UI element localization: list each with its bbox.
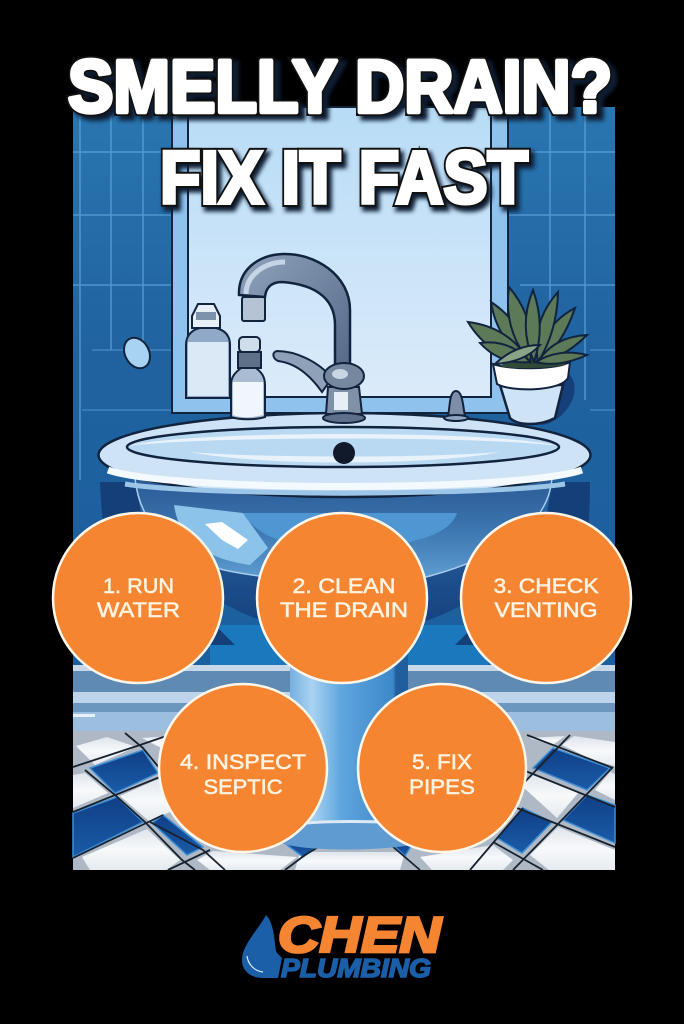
- title line 2: FIX IT FAST: [160, 136, 528, 219]
- sink drain: [333, 442, 355, 464]
- step 5 badge: [358, 684, 526, 852]
- step 3 badge: VENTING: [494, 599, 598, 622]
- step 4 badge: SEPTIC: [204, 776, 282, 799]
- step 2 badge: [257, 513, 427, 683]
- bottle: small: [231, 337, 265, 419]
- title line 2: FIX IT FAST: [160, 136, 528, 219]
- step 2 badge: 2. CLEAN: [292, 575, 396, 598]
- step 3 badge: 3. CHECK: [494, 575, 598, 598]
- drain stopper knob: [444, 391, 468, 421]
- logo wordmark: CHEN: CHEN: [278, 907, 442, 963]
- icon: water drop: [242, 915, 282, 978]
- title: [68, 45, 617, 223]
- logo: Chen Plumbing: [242, 907, 442, 983]
- title line 1: SMELLY DRAIN?: [73, 49, 617, 132]
- step 5 badge: 5. FIX: [412, 751, 472, 774]
- step 2 badge: THE DRAIN: [280, 599, 408, 622]
- step 4 badge: 4. INSPECT: [180, 751, 306, 774]
- baseboard molding: [73, 665, 615, 731]
- title line 1: SMELLY DRAIN?: [68, 45, 612, 128]
- step 5 badge: PIPES: [409, 776, 475, 799]
- soap bar: [119, 333, 155, 373]
- faucet: [239, 254, 365, 423]
- title line 1: SMELLY DRAIN?: [68, 45, 612, 128]
- sink rim: [98, 413, 590, 497]
- bottle: tall soap: [186, 304, 230, 398]
- wall tiles: [73, 107, 615, 667]
- checkered floor: [73, 731, 615, 870]
- sink basin underside: [135, 478, 552, 634]
- step 1 badge: 1. RUN: [103, 575, 174, 598]
- mirror: [172, 107, 508, 413]
- potted plant: [468, 287, 587, 425]
- sink pedestal: [278, 630, 425, 850]
- step 4 badge: [159, 684, 327, 852]
- step 3 badge: [461, 513, 631, 683]
- logo wordmark: PLUMBING: PLUMBING: [281, 953, 431, 983]
- panel: bathroom sink illustration: [73, 107, 615, 870]
- step 1 badge: WATER: [97, 599, 180, 622]
- title line 2: FIX IT FAST: [163, 140, 531, 223]
- step 1 badge: [53, 513, 223, 683]
